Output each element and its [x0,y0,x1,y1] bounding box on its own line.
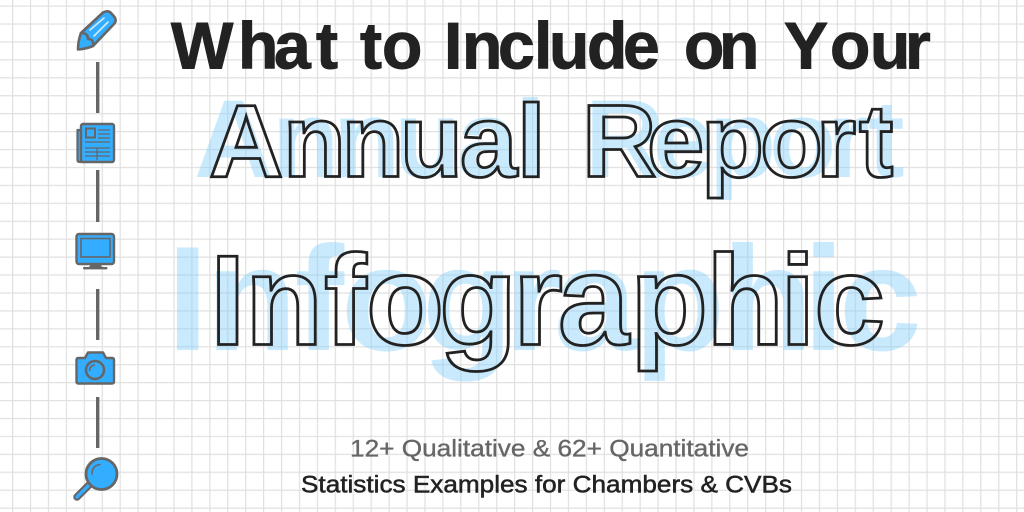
heading outline: Infographic: Infographic [210,230,885,372]
heading outline: Annual Report: Annual Report [209,84,893,198]
icon: monitor [76,234,114,269]
connector line 3 [96,289,99,340]
title: What to Include on Your: What to Include on Your [171,8,931,82]
heading shadow: Annual Report: Annual Report [194,78,905,201]
icon: magnifying glass [77,458,117,497]
icon: camera [76,352,114,384]
subtitle line 1: 12+ Qualitative & 62+ Quantitative [350,436,749,462]
connector line 1 [96,62,99,113]
heading shadow: Infographic: Infographic [167,215,922,382]
connector line 4 [96,397,99,448]
connector line 2 [96,170,99,222]
subtitle line 2: Statistics Examples for Chambers & CVBs [301,472,792,498]
icon: pencil [78,11,116,50]
icon: newspaper [78,124,114,162]
